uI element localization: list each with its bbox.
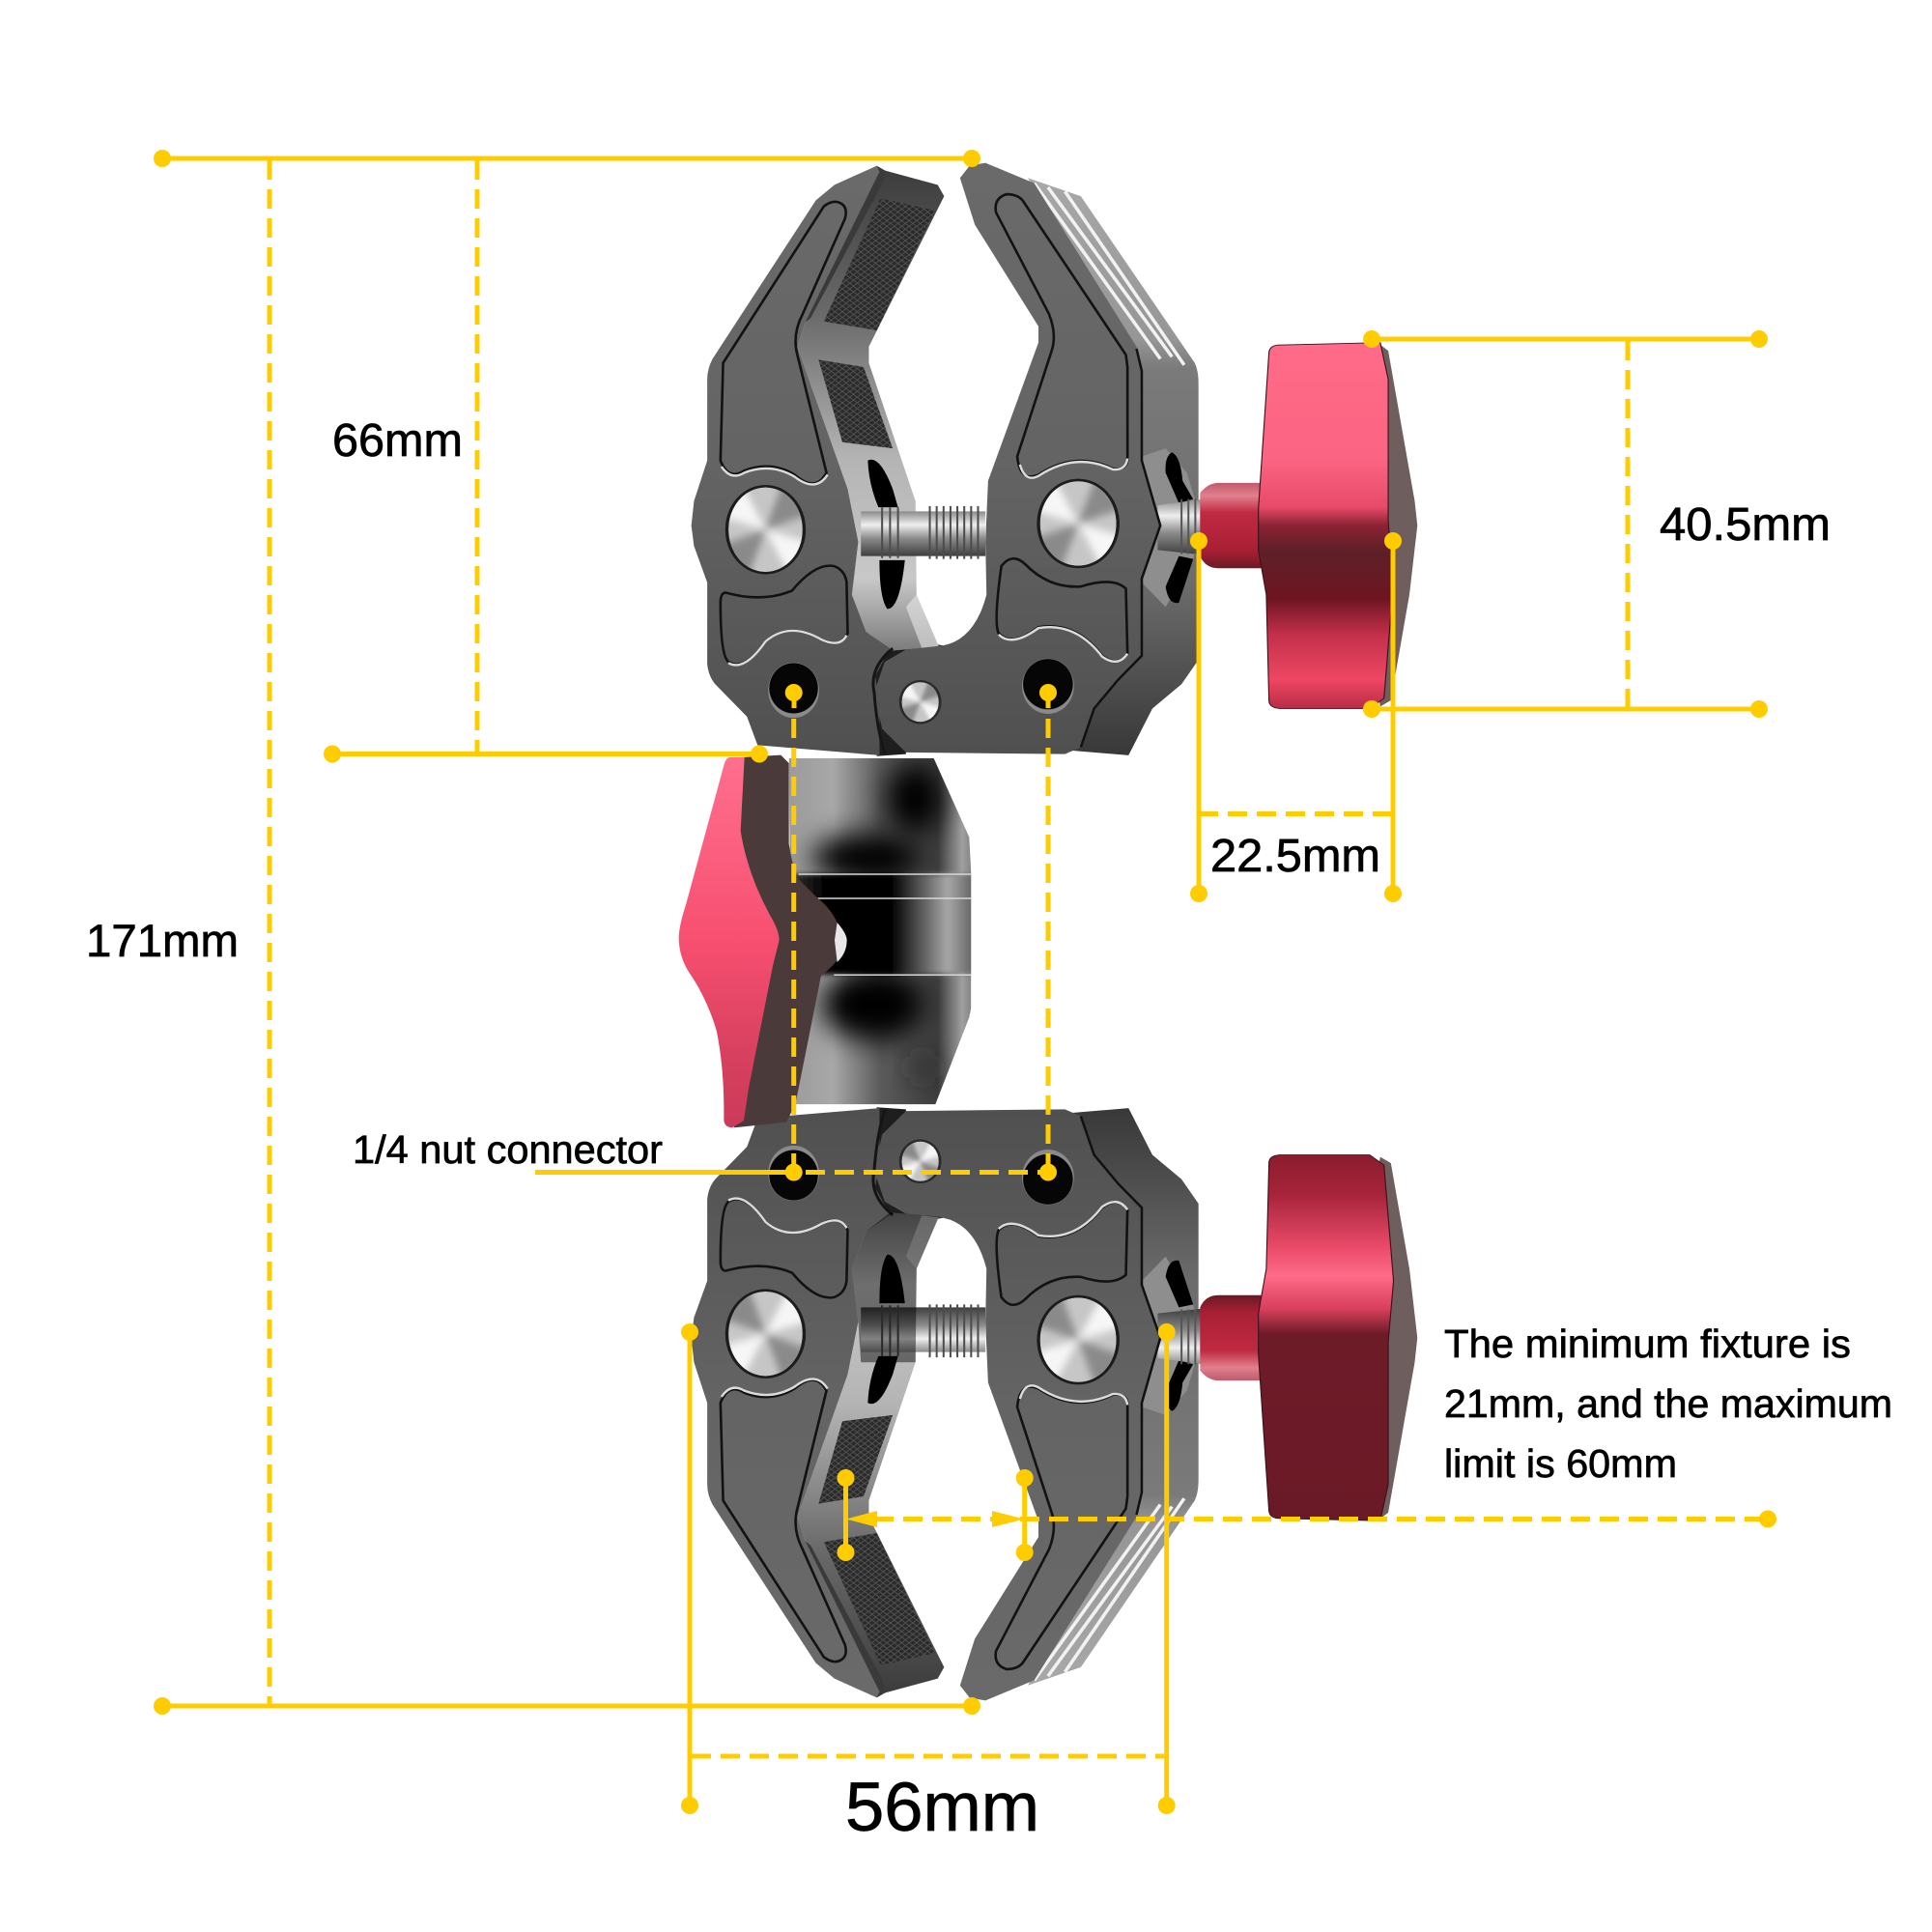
dimension: fixture range (837, 1321, 1892, 1561)
knob red face (679, 757, 780, 1127)
callout: 1/4 nut connector (353, 684, 1057, 1180)
text block: fixture note (1444, 1321, 1892, 1486)
label: 56mm: 56mm (845, 1770, 1039, 1846)
label: 171mm: 171mm (86, 915, 239, 966)
label: 66mm: 66mm (332, 415, 463, 467)
dimension: 40.5mm knob width (1363, 330, 1831, 718)
icon: upper red wing knob (1200, 343, 1417, 708)
label: 40.5mm: 40.5mm (1660, 499, 1831, 551)
label: 22.5mm: 22.5mm (1210, 831, 1380, 882)
label: 1/4 nut connector: 1/4 nut connector (353, 1127, 663, 1172)
ball joint body (785, 756, 976, 1106)
icon: lower red wing knob (1200, 1155, 1417, 1520)
knob side and hub (734, 755, 839, 1127)
text block: fixture note: 21mm, and the maximum (1444, 1381, 1892, 1426)
product: central ball joint with red knob (679, 755, 976, 1127)
dimension: 56mm clamp width (681, 1323, 1176, 1846)
dimension: 22.5mm knob depth (1190, 532, 1402, 902)
dimension: 66mm clamp height (324, 160, 768, 763)
dimension: 171mm overall height (86, 150, 980, 1715)
text block: fixture note: The minimum fixture is (1444, 1321, 1851, 1366)
product: lower clamp (692, 1107, 1417, 1700)
text block: fixture note: limit is 60mm (1444, 1441, 1677, 1486)
product: upper clamp (692, 163, 1417, 756)
